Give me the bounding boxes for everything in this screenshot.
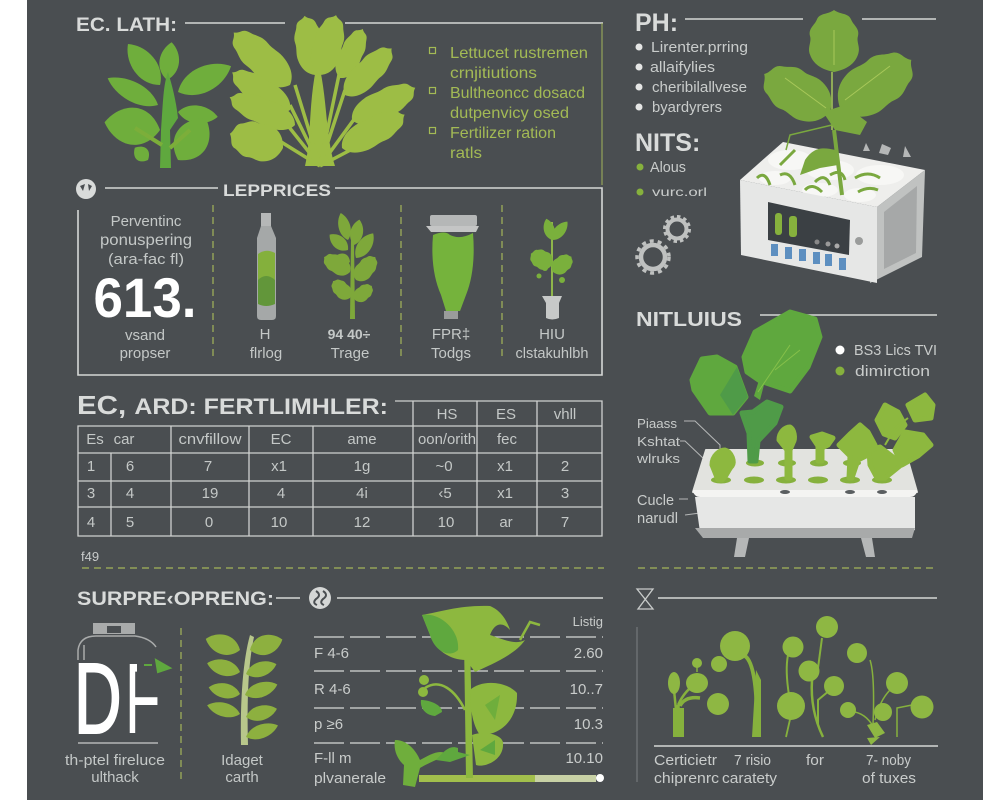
heading: EC, ARD: FERTLIMHLER: EC, ARD: FERTLIMHLER:	[77, 390, 388, 420]
bullet list: NITS: Alous	[650, 159, 686, 176]
plant labels: Cucle	[637, 492, 674, 509]
icon: DF jug	[74, 623, 170, 755]
label: tree: Trage	[331, 345, 369, 362]
table text: x1	[497, 485, 513, 502]
heading: LEPPRICES: LEPPRICES	[223, 181, 331, 200]
label: jug	[65, 752, 165, 786]
table text: 10	[438, 514, 454, 531]
table text: 4	[277, 485, 285, 502]
icon: gears	[637, 216, 690, 273]
data rows: Listig	[573, 614, 603, 629]
label: seedling: HIU	[539, 326, 565, 343]
bullet list: pH	[636, 39, 748, 116]
panel: pH	[635, 9, 936, 283]
stage captions: 7- noby	[866, 752, 911, 769]
data rows: 2.60	[574, 645, 603, 662]
icon: seedling row	[668, 616, 934, 745]
label: jug: th-ptel fireluce	[65, 752, 165, 769]
icon: round badge	[309, 587, 331, 609]
bullet list: lettuce nutrients: Fertilizer ration	[450, 125, 556, 142]
legend: BS3 Lics TVI	[854, 342, 937, 359]
table text: 7	[561, 514, 569, 531]
table text: 12	[354, 514, 370, 531]
table text: cnvfillow	[178, 431, 242, 448]
label: seedling: clstakuhlbh	[516, 345, 588, 362]
table text: car	[114, 431, 134, 448]
bullet list: NITS: vurc.orl	[652, 185, 707, 199]
stat: 613: propser	[120, 345, 170, 362]
table text: 5	[126, 514, 134, 531]
plant labels: Piaass	[637, 416, 677, 431]
icon: globe badge	[76, 179, 96, 199]
heading: EC LATH: EC. LATH:	[76, 15, 177, 36]
stage captions: for	[806, 752, 824, 769]
label: bottle	[250, 326, 282, 362]
table text: 3	[561, 485, 569, 502]
stage captions: Certicietr	[654, 752, 717, 769]
stage captions: caratety	[722, 770, 778, 787]
stat: 613: (ara-fac fl)	[108, 251, 184, 268]
data rows: plvanerale	[314, 770, 386, 787]
panel: EC and fertilizer table	[77, 390, 604, 568]
table text: oon/orith	[418, 431, 476, 448]
plant labels: narudl	[637, 510, 678, 527]
table grid	[78, 401, 602, 536]
icon: tree	[320, 211, 382, 319]
table text: Es	[86, 431, 104, 448]
table text: 19	[202, 485, 218, 502]
icon: fertilizer tube	[426, 215, 479, 319]
footnote: f49	[81, 549, 99, 564]
stat: 613: Perventinc	[111, 213, 182, 230]
legend	[836, 342, 937, 380]
icon: tall plant with growth bar	[395, 606, 604, 787]
icon: large lettuce plant	[223, 11, 422, 166]
table text: ar	[499, 514, 513, 531]
label: bottle: H	[260, 326, 270, 343]
heading: SURPRE OPRENG: SURPRE‹OPRENG:	[77, 589, 274, 610]
label: bottle: flrlog	[250, 345, 282, 362]
icon: DF jug: D	[74, 642, 122, 754]
stat: 613: ponuspering	[100, 232, 192, 249]
heading: NITS: NITS:	[635, 129, 700, 157]
label: tree: 94 40÷	[328, 326, 371, 342]
label: jug: ulthack	[91, 769, 139, 786]
label: tube: Todgs	[431, 345, 471, 362]
stat: 613: 613.	[94, 266, 196, 329]
table text: 7	[204, 458, 212, 475]
label: seedling	[516, 326, 588, 362]
plant labels: Kshtat	[637, 434, 680, 449]
table text: 4	[87, 514, 95, 531]
table text: ‹5	[438, 485, 452, 502]
icon: seedling in pot	[526, 217, 577, 320]
plant labels	[636, 416, 720, 527]
bullet list: lettuce nutrients: crnjitiutions	[450, 65, 537, 82]
icon: hydroponic box with plant	[740, 10, 925, 283]
label: tree	[328, 326, 371, 362]
data rows: 10.10	[565, 750, 603, 767]
table text: x1	[271, 458, 287, 475]
table text: 3	[87, 485, 95, 502]
icon: hydroponic planter	[692, 312, 933, 557]
bullet list: lettuce nutrients: Lettucet rustremen	[450, 45, 588, 62]
table text: EC	[271, 431, 292, 448]
data rows: p ≥6	[314, 716, 343, 733]
stage captions: of tuxes	[862, 770, 916, 787]
table text: 4i	[356, 485, 368, 502]
table text: ame	[347, 431, 377, 448]
table text: fec	[497, 431, 518, 448]
bullet list: pH: Lirenter.prring	[651, 39, 748, 56]
legend: dimirction	[855, 363, 930, 380]
icon: fern plant	[203, 630, 285, 745]
label: fern: Idaget	[221, 752, 264, 769]
icon: hourglass	[637, 589, 653, 609]
table text	[86, 406, 576, 531]
data rows: 10.3	[574, 716, 603, 733]
bullet list: NITS	[636, 159, 707, 199]
bullet list: lettuce nutrients	[430, 45, 588, 162]
table text: 4	[126, 485, 134, 502]
table text: 1g	[354, 458, 370, 475]
bullet list: pH: cheribilallvese	[652, 79, 747, 96]
bullet list: lettuce nutrients: dutpenvicy osed	[450, 105, 569, 122]
plant labels: wlruks	[636, 451, 681, 466]
table text: HS	[437, 406, 457, 423]
heading: NITLUIUS: NITLUIUS	[636, 309, 742, 331]
label: tube	[431, 326, 471, 362]
label: tube: FPR‡	[432, 326, 470, 343]
stage captions: chiprenrc	[654, 770, 720, 787]
data rows	[314, 614, 603, 787]
data rows: R 4-6	[314, 681, 351, 698]
table text: ~0	[435, 458, 453, 475]
panel: EC lath	[76, 11, 603, 185]
table text: 0	[205, 514, 213, 531]
bullet list: pH: byardyrers	[652, 99, 722, 116]
label: fern	[221, 752, 264, 786]
bullet list: pH: allaifylies	[650, 59, 715, 76]
icon: bottle	[257, 213, 276, 320]
label: fern: carth	[225, 769, 259, 786]
stat: 613	[94, 213, 196, 362]
table text: vhll	[554, 406, 576, 423]
table text: 6	[126, 458, 134, 475]
heading: PH: PH:	[635, 9, 678, 37]
icon: small leafy plant	[102, 37, 237, 169]
data rows: 10..7	[570, 681, 603, 698]
data rows: F 4-6	[314, 645, 349, 662]
bullet list: lettuce nutrients: Bultheoncc dosacd	[450, 85, 585, 102]
table text: 1	[87, 458, 95, 475]
table text: 2	[561, 458, 569, 475]
stage captions	[654, 752, 916, 787]
panel: LEPPRICES	[76, 179, 602, 375]
panel: seedling stages	[637, 589, 938, 787]
panel: NITLUIUS	[636, 309, 937, 568]
bullet list: lettuce nutrients: ratls	[450, 145, 482, 162]
table text: ES	[496, 406, 516, 423]
table text: 10	[271, 514, 287, 531]
data rows: F-ll m	[314, 750, 352, 767]
icon: DF jug: F	[125, 644, 160, 755]
stat: 613: vsand	[125, 327, 165, 344]
table text: x1	[497, 458, 513, 475]
stage captions: 7 risio	[734, 752, 771, 769]
panel: SURPRE OPRENG	[65, 587, 604, 787]
